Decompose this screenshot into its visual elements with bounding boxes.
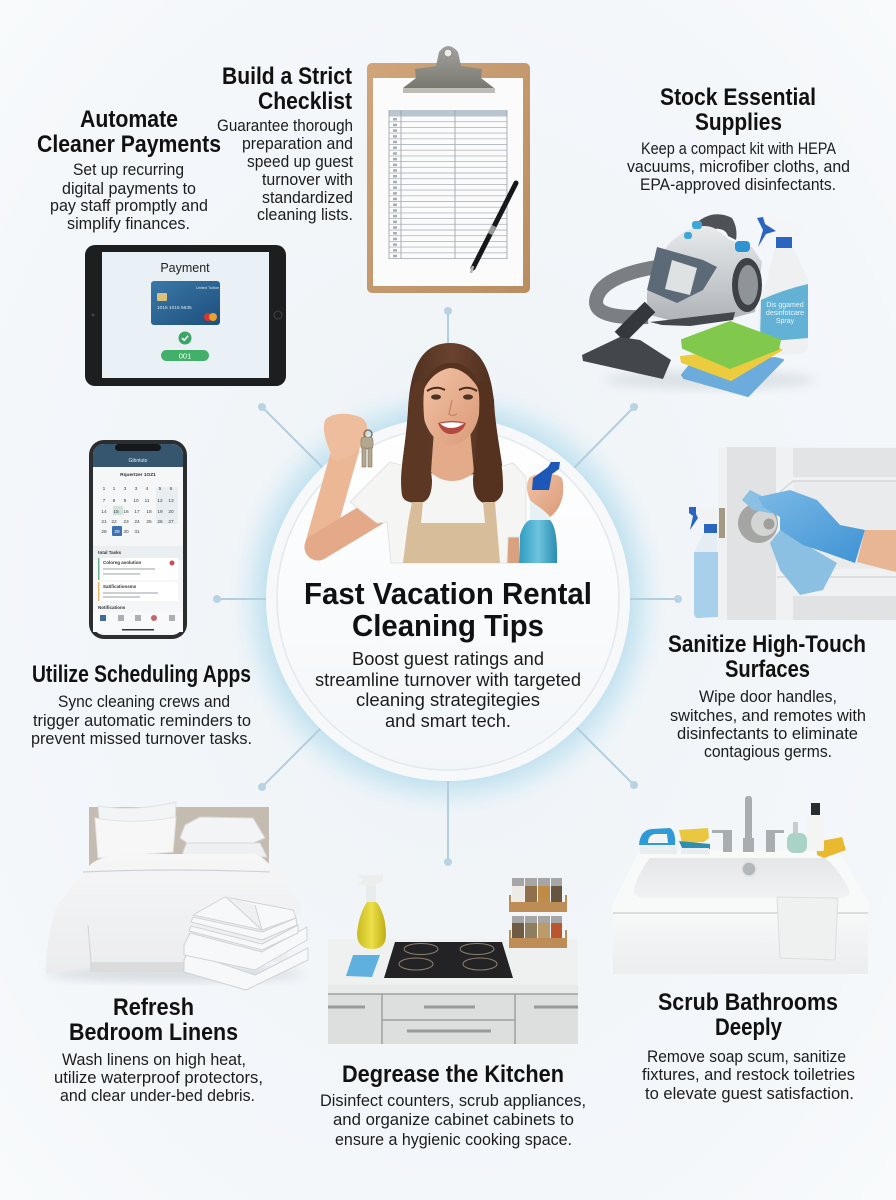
body text (320, 1091, 586, 1149)
body text: trigger automatic reminders to (33, 711, 251, 730)
icon: tablet payment: 1015 1015 5635 (157, 305, 192, 311)
spray bottle (694, 533, 717, 552)
spray bottle (519, 488, 557, 563)
heading: Refresh (113, 994, 194, 1021)
panel: build a strict checklist (217, 46, 530, 293)
central circle glow (223, 374, 673, 824)
faucet (712, 796, 784, 852)
heading: Scrub Bathrooms (658, 989, 838, 1016)
heading: Automate (80, 106, 178, 133)
body text (642, 1047, 855, 1103)
panel: degrease the kitchen (320, 875, 586, 1149)
tub deck (612, 850, 870, 913)
face (422, 363, 480, 445)
clip (403, 46, 494, 92)
icon: smartphone calendar: 1 (113, 486, 116, 492)
duvet (46, 854, 302, 974)
folded linens (184, 897, 308, 990)
heading (658, 989, 838, 1041)
body text: utilize waterproof protectors, (54, 1068, 263, 1087)
icon: smartphone calendar: Gibntuto (129, 458, 148, 464)
door knob (738, 503, 778, 543)
body text (54, 1050, 263, 1105)
icon: smartphone calendar: 9 (124, 498, 127, 504)
vacuum handle (694, 214, 736, 240)
icon: smartphone calendar: 6 (170, 486, 173, 492)
icon: smartphone calendar: 13 (168, 498, 174, 504)
icon: vacuum, spray and cloths: Dis ggamed (766, 302, 804, 309)
panel: refresh bedroom linens (46, 802, 308, 1105)
cabinets (328, 994, 578, 1044)
body text: Disinfect counters, scrub appliances, (320, 1091, 586, 1110)
cloth (770, 530, 837, 595)
icon: gloved hand wiping door handle (689, 447, 896, 620)
hair front strands (401, 381, 432, 503)
body text: and clear under-bed debris. (60, 1086, 255, 1105)
heading (37, 106, 221, 158)
tub front (613, 913, 868, 974)
icon: smartphone calendar: total Tasks (98, 550, 122, 555)
icon: smartphone calendar: 21 (101, 519, 107, 525)
heading: Supplies (695, 109, 782, 136)
body text (217, 116, 353, 224)
icon: smartphone calendar: 30 (123, 529, 129, 535)
sponges (679, 828, 709, 843)
icon: smartphone calendar: 12 (157, 498, 163, 504)
heading: Utilize Scheduling Apps (32, 661, 251, 688)
heading (222, 63, 352, 115)
icon: smartphone calendar: 3 (124, 486, 127, 492)
icon: smartphone calendar: 31 (134, 529, 140, 535)
body text: vacuums, microfiber cloths, and (627, 157, 850, 176)
heading (668, 631, 866, 683)
central title: Cleaning Tips (352, 608, 544, 643)
body text: preparation and (242, 134, 353, 153)
icon: smartphone calendar: 26 (157, 519, 163, 525)
body text: Set up recurring (73, 160, 184, 179)
toiletries bottles (787, 833, 807, 853)
icon: smartphone calendar (89, 440, 187, 639)
central subtitle: cleaning strategitegies (356, 690, 540, 710)
heading: Degrease the Kitchen (342, 1061, 564, 1088)
body text: prevent missed turnover tasks. (31, 729, 252, 748)
panel: scrub bathrooms deeply (612, 796, 870, 1103)
checklist table (389, 110, 507, 259)
door (718, 447, 896, 620)
canister (647, 247, 717, 303)
icon: smartphone calendar: 4 (146, 486, 149, 492)
spice racks (509, 878, 567, 948)
body text (50, 160, 208, 233)
icon: smartphone calendar: 11 (145, 498, 150, 504)
body text: to elevate guest satisfaction. (645, 1084, 854, 1103)
heading: Build a Strict (222, 63, 352, 90)
icon: smartphone calendar: 22 (111, 519, 117, 525)
body text: digital payments to (62, 179, 196, 198)
body text: Wash linens on high heat, (62, 1050, 246, 1069)
heading: Stock Essential (660, 84, 816, 111)
icon: smartphone calendar: Notifications (98, 605, 126, 610)
central title: Fast Vacation Rental (304, 576, 592, 611)
panel: stock essential supplies (582, 84, 850, 396)
heading (660, 84, 816, 136)
connector lines (213, 307, 682, 866)
icon: smartphone calendar: 5 (159, 486, 162, 492)
icon: tablet payment: 001 (179, 352, 191, 360)
body text: disinfectants to eliminate (677, 724, 858, 743)
icon: vacuum, spray and cloths: Spray (776, 318, 795, 325)
forearm (857, 530, 896, 572)
door latch plate (719, 508, 725, 538)
body text (627, 139, 850, 194)
right arm (507, 535, 519, 563)
body text: Guarantee thorough (217, 116, 353, 135)
body text: standardized (262, 188, 353, 207)
body text: Keep a compact kit with HEPA (641, 139, 837, 158)
glove (758, 490, 865, 563)
icon: clipboard (367, 46, 530, 293)
spray trigger head (532, 462, 560, 490)
icon: vacuum, spray and cloths (582, 214, 815, 396)
icon: bathroom tub and toiletries (612, 796, 870, 974)
headboard (89, 807, 269, 867)
woman holding keys and spray bottle (318, 343, 563, 563)
detergent bottle (357, 902, 386, 949)
vacuum body (647, 226, 762, 323)
central subtitle (315, 649, 581, 731)
eyes and brows (427, 388, 477, 391)
panel: automate cleaner payments (37, 106, 286, 386)
central title (304, 576, 592, 643)
icon: smartphone calendar: 27 (168, 519, 174, 525)
body text (670, 687, 866, 761)
brush (639, 828, 675, 845)
heading (69, 994, 238, 1046)
icon: smartphone calendar: 20 (168, 509, 174, 515)
body text: and organize cabinet cabinets to (333, 1110, 574, 1129)
icon: tablet payment: Payment (160, 261, 210, 275)
body text: cleaning lists. (257, 205, 353, 224)
vacuum hose (596, 267, 657, 317)
icon: smartphone calendar: 10 (133, 498, 139, 504)
icon: kitchen counter (328, 875, 578, 1044)
icon: smartphone calendar: 14 (101, 509, 107, 515)
heading: Surfaces (725, 656, 810, 683)
icon: smartphone calendar: 15 (113, 509, 119, 515)
left arm (318, 448, 376, 547)
icon: smartphone calendar: Coloreg avolution (103, 560, 142, 565)
nose (449, 400, 457, 416)
heading: Bedroom Linens (69, 1019, 238, 1046)
central subtitle: and smart tech. (385, 711, 511, 731)
vacuum nozzle (620, 307, 650, 337)
body text: ensure a hygienic cooking space. (335, 1130, 572, 1149)
counter (328, 939, 578, 985)
body text (31, 692, 252, 748)
icon: smartphone calendar: 17 (134, 509, 140, 515)
icon: tablet payment (85, 245, 286, 386)
body text: switches, and remotes with (670, 706, 866, 725)
icon: smartphone calendar: 29 (114, 529, 120, 535)
heading: Deeply (715, 1014, 783, 1041)
towel (777, 897, 838, 960)
body text: turnover with (262, 170, 353, 189)
panel: utilize scheduling apps (31, 440, 252, 748)
body text: Wipe door handles, (699, 687, 837, 706)
hand holding bottle (527, 474, 563, 517)
icon: smartphone calendar: 3 (135, 486, 138, 492)
heading: Checklist (258, 88, 352, 115)
cooktop (384, 942, 513, 978)
keys (361, 430, 373, 467)
stacked cloths (682, 358, 783, 396)
vacuum wheel (732, 258, 762, 312)
body text: Sync cleaning crews and (58, 692, 230, 711)
body text: contagious germs. (704, 742, 832, 761)
central subtitle: streamline turnover with targeted (315, 670, 581, 690)
icon: smartphone calendar: 8 (113, 498, 116, 504)
heading: Cleaner Payments (37, 131, 221, 158)
body text: fixtures, and restock toiletries (642, 1065, 855, 1084)
smile (438, 421, 466, 434)
heading: Sanitize High-Touch (668, 631, 866, 658)
icon: smartphone calendar: Rquertzer 1OZ1 (120, 472, 156, 478)
panel: sanitize high-touch surfaces (668, 447, 896, 761)
icon: smartphone calendar: Satificationsms (103, 584, 137, 589)
apron (403, 502, 500, 563)
icon: smartphone calendar: 1 (103, 486, 106, 492)
shirt (350, 462, 526, 563)
icon: smartphone calendar: 23 (123, 519, 129, 525)
icon: vacuum, spray and cloths: desinfotcare (766, 310, 804, 317)
neck (431, 430, 474, 481)
body text: simplify finances. (67, 214, 190, 233)
body text: speed up guest (247, 152, 353, 171)
body text: Remove soap scum, sanitize (647, 1047, 846, 1066)
body text: EPA-approved disinfectants. (640, 175, 836, 194)
pen (471, 183, 516, 273)
hand with keys (324, 414, 367, 460)
hair back (401, 343, 504, 503)
icon: smartphone calendar: 24 (134, 519, 140, 525)
spray bottle (758, 248, 808, 355)
icon: smartphone calendar: 16 (123, 509, 129, 515)
icon: smartphone calendar: 19 (157, 509, 163, 515)
icon: bed and folded linens (46, 802, 308, 990)
central subtitle: Boost guest ratings and (352, 649, 544, 669)
icon: smartphone calendar: 25 (146, 519, 152, 525)
icon: smartphone calendar: 7 (103, 498, 106, 504)
basin (634, 858, 850, 898)
pillows (98, 802, 176, 824)
body text: pay staff promptly and (50, 196, 208, 215)
icon: smartphone calendar: 28 (101, 529, 107, 535)
central circle (266, 417, 630, 781)
cloth (346, 955, 380, 977)
icon: smartphone calendar: 18 (146, 509, 152, 515)
icon: tablet payment: United Tuition (196, 286, 219, 290)
